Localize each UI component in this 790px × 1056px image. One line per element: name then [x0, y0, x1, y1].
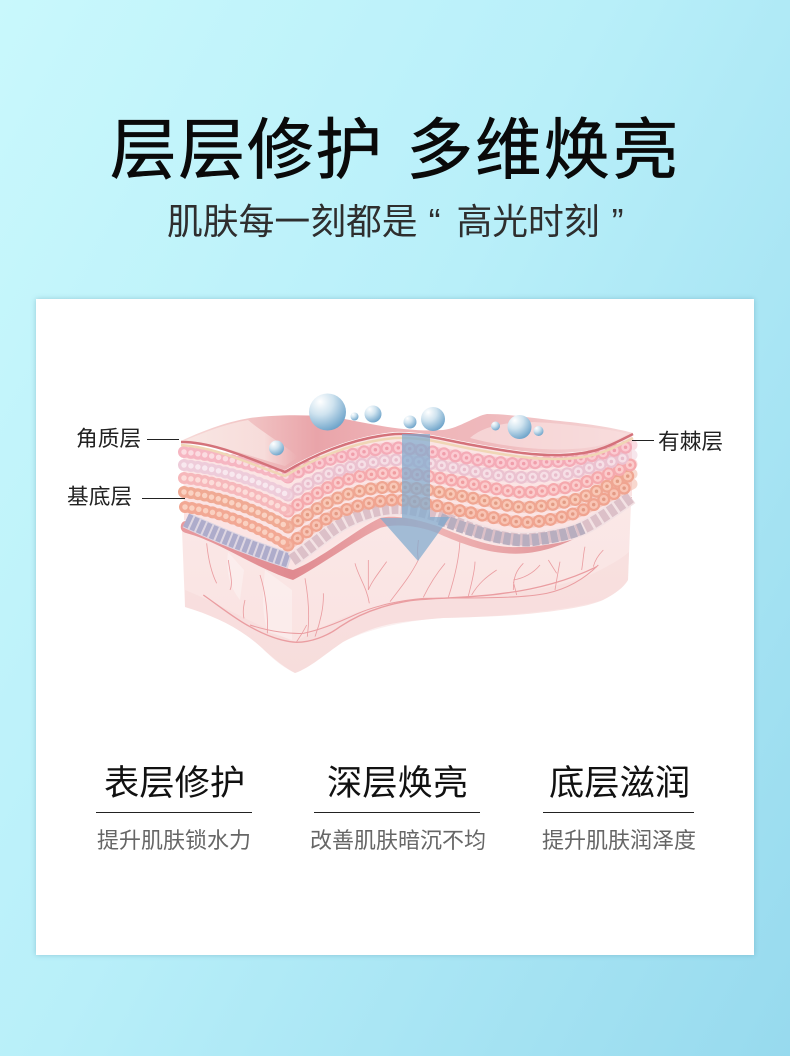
basement band	[181, 497, 632, 580]
divider	[314, 812, 480, 813]
title: 层层修护 多维焕亮	[110, 114, 680, 188]
front-right cell rows	[288, 445, 632, 545]
keratinocyte cell block	[183, 434, 632, 569]
divider	[543, 812, 694, 813]
leader line	[632, 440, 654, 441]
description: 提升肌肤润泽度	[542, 828, 696, 853]
columnar basal cells	[186, 497, 631, 561]
feature: deep brightening	[310, 764, 486, 853]
label: stratum corneum: 角质层	[76, 426, 141, 451]
heading: 表层修护	[104, 764, 245, 803]
moisture bubbles	[269, 394, 544, 456]
subtitle: 肌肤每一刻都是 “ 高光时刻 ”	[167, 202, 624, 242]
heading: 深层焕亮	[327, 764, 468, 803]
dermis highlights	[227, 552, 292, 640]
penetration arrow	[380, 434, 450, 561]
panel: white card	[36, 299, 754, 955]
feature: base moisturizing	[542, 764, 696, 853]
front-left cell rows	[184, 452, 288, 545]
leader line	[142, 498, 185, 499]
lower dermis tint	[185, 552, 629, 673]
feature: surface repair	[96, 764, 252, 853]
description: 提升肌肤锁水力	[97, 828, 251, 853]
dermis block	[182, 500, 631, 673]
blood vessels	[203, 540, 603, 642]
divider	[96, 812, 252, 813]
front rim	[181, 434, 633, 476]
top surface (stratum corneum)	[181, 414, 633, 476]
light sheen	[186, 420, 298, 466]
label: basal layer: 基底层	[67, 484, 132, 509]
label: spinous layer: 有棘层	[658, 429, 723, 454]
leader line	[147, 439, 179, 440]
description: 改善肌肤暗沉不均	[310, 828, 486, 853]
heading: 底层滋润	[549, 764, 690, 803]
cell block base	[183, 434, 632, 569]
